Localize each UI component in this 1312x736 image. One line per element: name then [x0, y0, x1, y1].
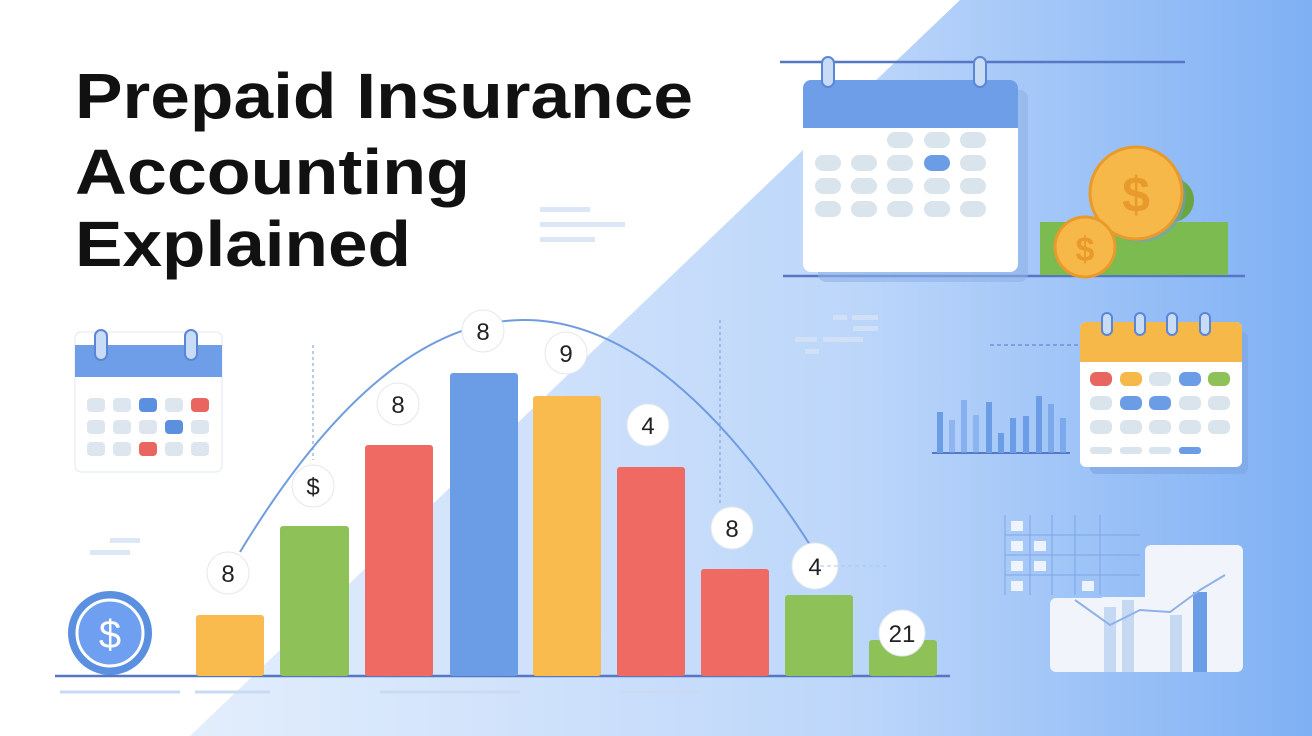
icon: dollar coin: $: [99, 613, 121, 657]
value labels: 4: [808, 554, 822, 581]
baseline: [55, 675, 950, 677]
icon: small calendar: [990, 313, 1248, 474]
icon: bottom-right report chart: [1005, 515, 1243, 672]
icon: left calendar: [75, 330, 222, 472]
value labels: 4: [641, 413, 655, 440]
title: Explained: [75, 208, 411, 280]
value labels: $: [306, 474, 320, 501]
title: Accounting: [75, 136, 470, 208]
title: Prepaid Insurance: [75, 60, 693, 132]
mini bar chart: [932, 396, 1070, 453]
icon: top calendar with coins: $: [1076, 231, 1095, 269]
value labels: 8: [221, 561, 235, 588]
value labels: [207, 310, 925, 656]
icon: dollar coin: [68, 591, 152, 675]
value labels: 21: [889, 621, 915, 648]
title: [75, 60, 693, 280]
bar chart: [196, 373, 937, 676]
value labels: 8: [476, 319, 490, 346]
value labels: 8: [391, 392, 405, 419]
icon: top calendar with coins: [780, 57, 1245, 282]
icon: top calendar with coins: $: [1122, 167, 1150, 223]
value labels: 9: [559, 341, 573, 368]
value labels: 8: [725, 516, 739, 543]
arc: [240, 320, 812, 552]
